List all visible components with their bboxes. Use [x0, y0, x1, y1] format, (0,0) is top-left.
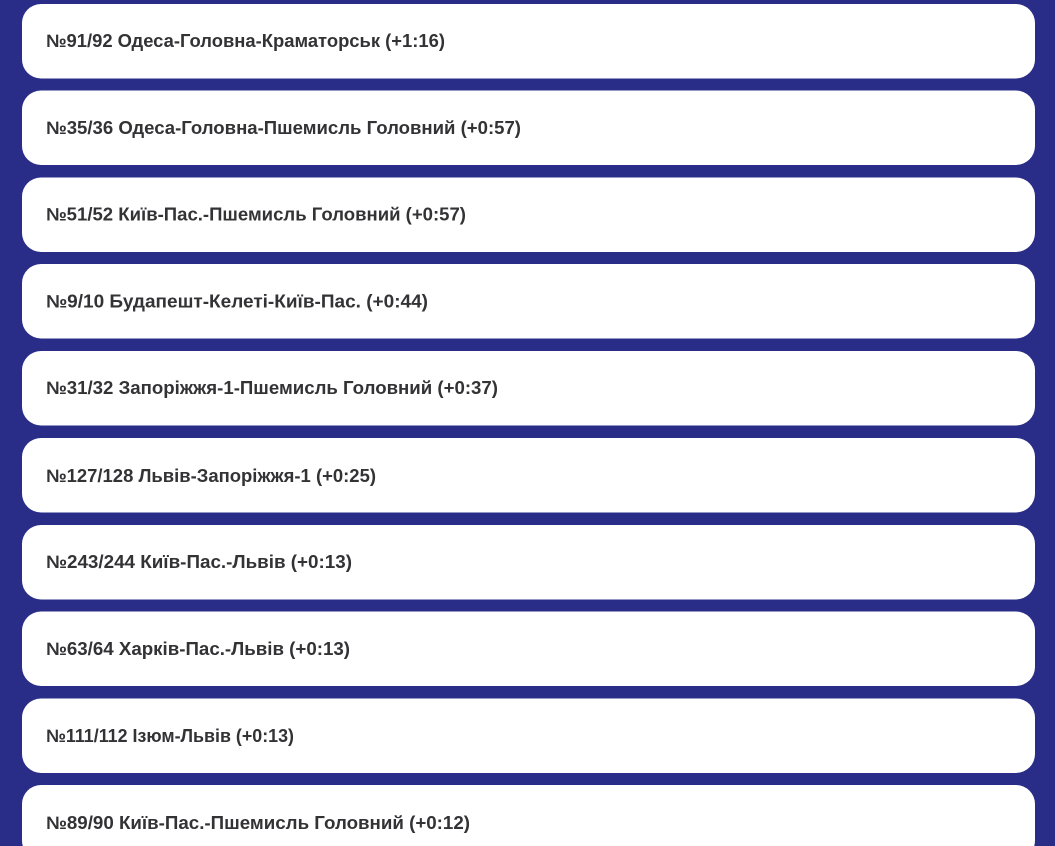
card: train 9/10: №9/10 Будапешт-Келеті-Київ-Пас. (+0:44) [46, 292, 428, 312]
card: train 111/112 [22, 698, 1035, 773]
card: train 243/244 [22, 525, 1035, 600]
card: train 51/52: №51/52 Київ-Пас.-Пшемисль Головний (+0:57) [46, 204, 466, 224]
card: train 89/90 [22, 785, 1035, 846]
card: train 89/90: №89/90 Київ-Пас.-Пшемисль Головний (+0:12) [46, 813, 470, 833]
card: train 127/128 [22, 438, 1035, 512]
card: train 91/92: №91/92 Одеса-Головна-Краматорськ (+1:16) [46, 31, 445, 51]
card: train 9/10 [22, 264, 1035, 338]
card: train 31/32 [22, 351, 1035, 426]
card: train 51/52 [22, 178, 1035, 252]
card: train 127/128: №127/128 Львів-Запоріжжя-1 (+0:25) [46, 466, 376, 486]
card: train 63/64: №63/64 Харків-Пас.-Львів (+0:13) [46, 639, 350, 659]
card: train 35/36 [22, 90, 1035, 165]
card: train 91/92 [22, 4, 1035, 78]
card: train 35/36: №35/36 Одеса-Головна-Пшемисль Головний (+0:57) [46, 118, 521, 138]
card: train 243/244: №243/244 Київ-Пас.-Львів (+0:13) [46, 552, 352, 572]
card: train 31/32: №31/32 Запоріжжя-1-Пшемисль Головний (+0:37) [46, 378, 498, 398]
card: train 63/64 [22, 612, 1035, 686]
card: train 111/112: №111/112 Ізюм-Львів (+0:13) [46, 726, 294, 746]
